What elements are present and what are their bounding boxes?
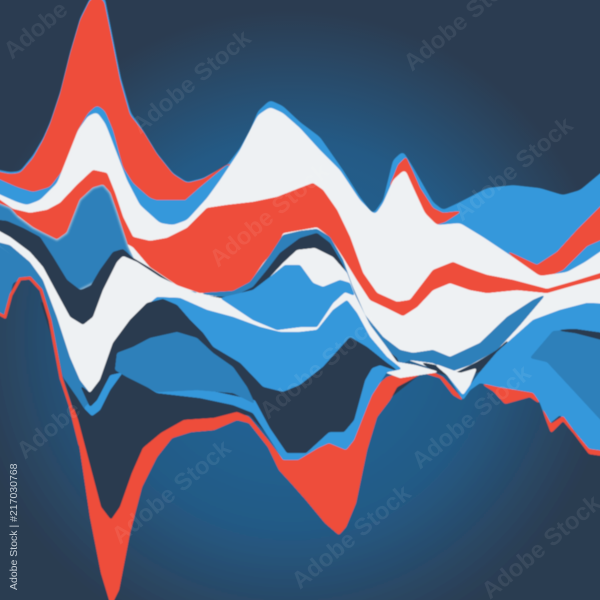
- right red band: [505, 197, 600, 280]
- thin navy right: [420, 338, 510, 378]
- watermark 9: Adobe Stock: [107, 434, 237, 550]
- red peak stream: [0, 0, 234, 200]
- watermark 10: Adobe Stock: [287, 479, 417, 595]
- watermark 3: Adobe Stock: [127, 24, 257, 140]
- watermark 7: Adobe: [12, 396, 86, 465]
- dark blue peak: [0, 185, 135, 300]
- wide white stream: [0, 226, 440, 393]
- watermark 8: Adobe Stock: [407, 359, 537, 475]
- left dark blue stream: [0, 240, 130, 416]
- watermark 5: Adobe Stock: [205, 157, 335, 273]
- lower background field: [0, 235, 600, 600]
- bottom red stream: [71, 367, 465, 600]
- white tip: [433, 363, 477, 395]
- red stream right: [480, 383, 600, 457]
- vertical credit text: Adobe Stock | #217030768: [8, 463, 20, 590]
- watermark 6: Adobe Stock: [255, 309, 385, 425]
- top light blue stream: [0, 0, 600, 420]
- watermark 4: Adobe Stock: [449, 111, 579, 227]
- thin red outline left: [0, 278, 80, 445]
- thin blue band: [175, 229, 565, 372]
- upper light blue lobe: [220, 265, 355, 330]
- dark blue lobe: [115, 332, 255, 404]
- dark blue right field: [530, 330, 600, 430]
- small red peak: [390, 157, 462, 228]
- second light blue band: [0, 105, 230, 300]
- navy stream: [0, 219, 402, 372]
- lower light blue lobe: [84, 297, 423, 460]
- navy hump: [80, 299, 400, 453]
- big red band: [0, 170, 600, 316]
- light blue right field: [447, 303, 600, 453]
- navy area below streams: [40, 300, 423, 525]
- navy sliver right: [553, 329, 600, 342]
